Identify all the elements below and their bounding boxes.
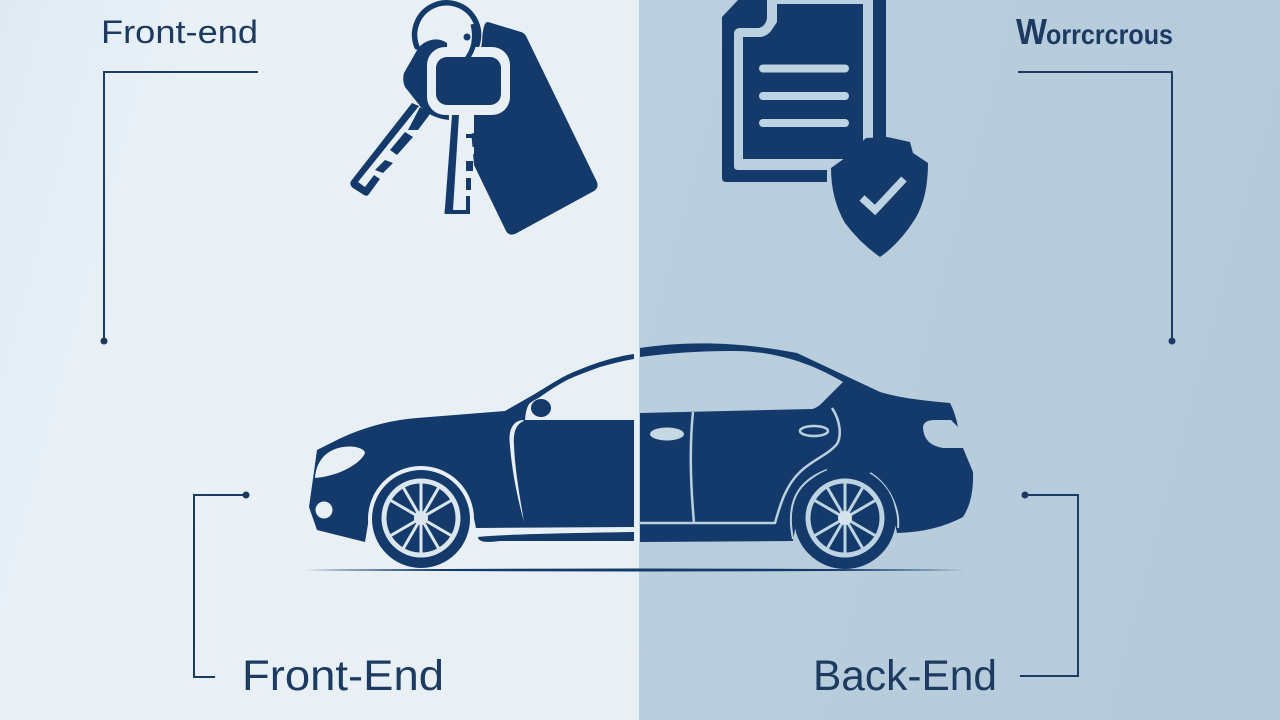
back key head [403, 39, 449, 120]
illustration: car silhouette [303, 343, 973, 572]
connector: top left bracket [100, 72, 258, 344]
rear wheel [794, 467, 896, 569]
icon: warranty document with shield [722, 0, 928, 257]
key ring [415, 3, 479, 61]
connector: top right bracket [1018, 72, 1176, 344]
document sheet [743, 4, 863, 159]
rear door handle [800, 426, 828, 436]
headlight [315, 446, 365, 478]
car rear half body [640, 343, 973, 542]
front key head [427, 47, 510, 115]
panel: front-end background [0, 0, 639, 720]
front sill strip [478, 532, 634, 542]
connector: bottom left bracket [194, 492, 250, 677]
front door handle [650, 428, 684, 440]
connector: bottom right bracket [1020, 492, 1078, 676]
icon: car keys with tag [350, 3, 598, 235]
heading: top right label [1016, 11, 1173, 52]
panel: back-end background [639, 0, 1280, 720]
ground line [303, 568, 965, 572]
heading: top right label: W [1016, 11, 1047, 52]
label: back-end: Back-End [813, 652, 997, 700]
document light outline [734, 0, 873, 170]
front wheel [372, 470, 470, 568]
wing mirror [531, 399, 551, 417]
key tag [470, 22, 598, 235]
rear wheel arch lines [791, 470, 898, 539]
shield [831, 137, 928, 257]
front wheel arch [368, 466, 474, 572]
checkmark [862, 179, 904, 210]
back key shaft [350, 103, 430, 196]
label: front-end: Front-End [242, 652, 444, 700]
document text lines [763, 68, 845, 123]
ring link over key head [461, 24, 474, 64]
front door line [510, 420, 524, 522]
front key shaft [444, 115, 475, 214]
rear body line [640, 408, 840, 523]
heading: top left label: Front-end [101, 14, 258, 50]
document outer frame [722, 0, 886, 182]
car front half body [309, 354, 634, 542]
heading: top right label: orrcrcrous [1046, 19, 1173, 50]
rear door divider [691, 412, 694, 523]
fog light [316, 502, 332, 518]
